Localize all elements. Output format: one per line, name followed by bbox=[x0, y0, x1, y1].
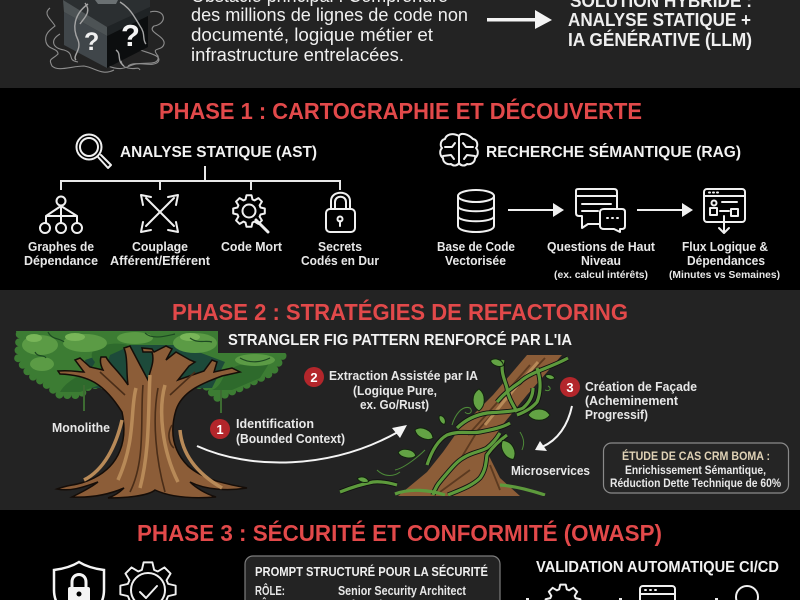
text: hybrid solution bbox=[568, 0, 752, 50]
labels: static analysis items: Code Mort bbox=[221, 240, 283, 254]
heading: automated CI/CD validation: VALIDATION AUTOMATIQUE CI/CD bbox=[536, 559, 779, 576]
text: main obstacle: des millions de lignes de code non bbox=[191, 4, 468, 25]
icon: gear with check bbox=[120, 562, 176, 600]
arrow: step 1 to step 2 bbox=[197, 425, 407, 463]
labels: static analysis items: Graphes de bbox=[28, 240, 94, 254]
heading: static analysis: ANALYSE STATIQUE (AST) bbox=[120, 144, 317, 161]
text: hybrid solution: ANALYSE STATIQUE + bbox=[568, 10, 751, 30]
illustration: strangler vine on trunk bbox=[340, 355, 568, 496]
subtitle backing and text: STRANGLER FIG PATTERN RENFORCÉ PAR L'IA bbox=[228, 332, 572, 349]
step 1: Identification bbox=[236, 417, 314, 431]
panel: phase 1 bbox=[0, 88, 800, 290]
step 3: (Acheminement bbox=[585, 394, 679, 408]
labels: semantic search items: Niveau bbox=[581, 254, 621, 268]
step 3: Création de Façade bbox=[585, 380, 697, 394]
icon: tangled black box bbox=[46, 0, 164, 72]
labels: semantic search items: (Minutes vs Semaines) bbox=[669, 269, 780, 281]
illustration: monolith tree bbox=[18, 331, 283, 498]
panel: phase 3 bbox=[0, 510, 800, 600]
arrow: questions to logic flow bbox=[637, 203, 693, 217]
icon: CI user bbox=[736, 586, 758, 600]
icon: gear magnifier bbox=[233, 195, 268, 232]
heading: phase 2: PHASE 2 : STRATÉGIES DE REFACTORING bbox=[172, 298, 628, 325]
text: main obstacle: documenté, logique métier et bbox=[191, 24, 433, 45]
labels: static analysis items: Secrets bbox=[318, 240, 362, 254]
vines bbox=[340, 358, 568, 495]
icon: dependency graph bbox=[40, 196, 82, 233]
heading: phase 1: PHASE 1 : CARTOGRAPHIE ET DÉCOUVERTE bbox=[159, 97, 642, 124]
trunk and roots bbox=[57, 346, 247, 498]
panel: structured prompt: Senior Security Architect bbox=[338, 584, 467, 598]
step 2: 2 bbox=[310, 370, 318, 385]
subtitle backing and text bbox=[218, 325, 580, 353]
callout: BOMA CRM case study: Enrichissement Sémantique, bbox=[625, 465, 766, 477]
arrow: database to questions bbox=[508, 203, 564, 217]
step 1 bbox=[210, 417, 345, 446]
text: hybrid solution: IA GÉNÉRATIVE (LLM) bbox=[568, 29, 752, 50]
labels: semantic search items: Flux Logique & bbox=[682, 240, 768, 254]
arrow: obstacle to solution bbox=[487, 10, 552, 29]
heading: phase 3: PHASE 3 : SÉCURITÉ ET CONFORMITÉ (OWASP) bbox=[137, 519, 662, 546]
step 2: ex. Go/Rust) bbox=[360, 398, 429, 412]
labels: semantic search items: Questions de Haut bbox=[547, 240, 656, 254]
canopy bbox=[18, 331, 283, 398]
panel: structured prompt: RÔLE: bbox=[255, 583, 285, 598]
icon: shield with lock bbox=[54, 562, 104, 600]
step 3: 3 bbox=[566, 380, 574, 395]
labels: static analysis items: Couplage bbox=[132, 240, 188, 254]
labels: static analysis items bbox=[24, 240, 379, 268]
labels: semantic search items: Base de Code bbox=[437, 240, 515, 254]
callout: BOMA CRM case study bbox=[604, 443, 788, 493]
label: microservices: Microservices bbox=[511, 463, 590, 478]
step 3 bbox=[560, 377, 697, 422]
icon: magnifier bbox=[76, 134, 111, 168]
step 2 bbox=[304, 367, 478, 412]
panel: structured prompt: PROMPT STRUCTURÉ POUR LA SÉCURITÉ bbox=[255, 564, 488, 579]
labels: semantic search items: Dépendances bbox=[687, 254, 765, 268]
leaves bbox=[357, 357, 555, 484]
step 1: (Bounded Context) bbox=[236, 432, 345, 446]
labels: static analysis items: Codés en Dur bbox=[301, 254, 379, 268]
icon: CI window bbox=[640, 586, 675, 600]
icon: CI gear bbox=[546, 585, 580, 600]
tree connector bbox=[61, 166, 340, 190]
icon: tangled black box: ? bbox=[121, 18, 140, 53]
panel: phase 2 bbox=[0, 290, 800, 510]
panel: context band bbox=[0, 0, 800, 88]
heading: semantic search: RECHERCHE SÉMANTIQUE (RAG) bbox=[486, 144, 741, 161]
branch bbox=[398, 355, 562, 496]
callout: BOMA CRM case study: Réduction Dette Technique de 60% bbox=[610, 478, 781, 490]
labels: semantic search items bbox=[437, 240, 780, 281]
step 3: Progressif) bbox=[585, 408, 648, 422]
step 2: Extraction Assistée par IA bbox=[329, 369, 478, 383]
icon: tangled black box: ? bbox=[84, 28, 99, 56]
label: monolith: Monolithe bbox=[52, 420, 110, 435]
labels: semantic search items: (ex. calcul intérêts) bbox=[554, 269, 648, 281]
labels: static analysis items: Afférent/Efférent bbox=[110, 254, 211, 268]
callout: BOMA CRM case study: ÉTUDE DE CAS CRM BOMA : bbox=[622, 448, 770, 463]
vines hanging bbox=[84, 385, 221, 413]
labels: semantic search items: Vectorisée bbox=[445, 254, 506, 268]
icon: coupling arrows bbox=[141, 195, 178, 232]
panel: structured prompt bbox=[245, 556, 500, 600]
text: main obstacle bbox=[191, 0, 468, 65]
icon: question chat bbox=[576, 189, 625, 232]
step 1: 1 bbox=[216, 422, 224, 437]
arrows: CI pipeline steps bbox=[526, 598, 718, 600]
text: main obstacle: infrastructure entrelacées. bbox=[191, 44, 404, 65]
step 2: (Logique Pure, bbox=[353, 384, 437, 398]
icon: padlock bbox=[326, 193, 355, 232]
icon: vector database bbox=[458, 190, 494, 232]
labels: static analysis items: Dépendance bbox=[24, 254, 98, 268]
arrow: step 3 to microservices bbox=[535, 406, 572, 451]
icon: logic flow window bbox=[704, 189, 745, 233]
icon: brain bbox=[440, 134, 478, 166]
